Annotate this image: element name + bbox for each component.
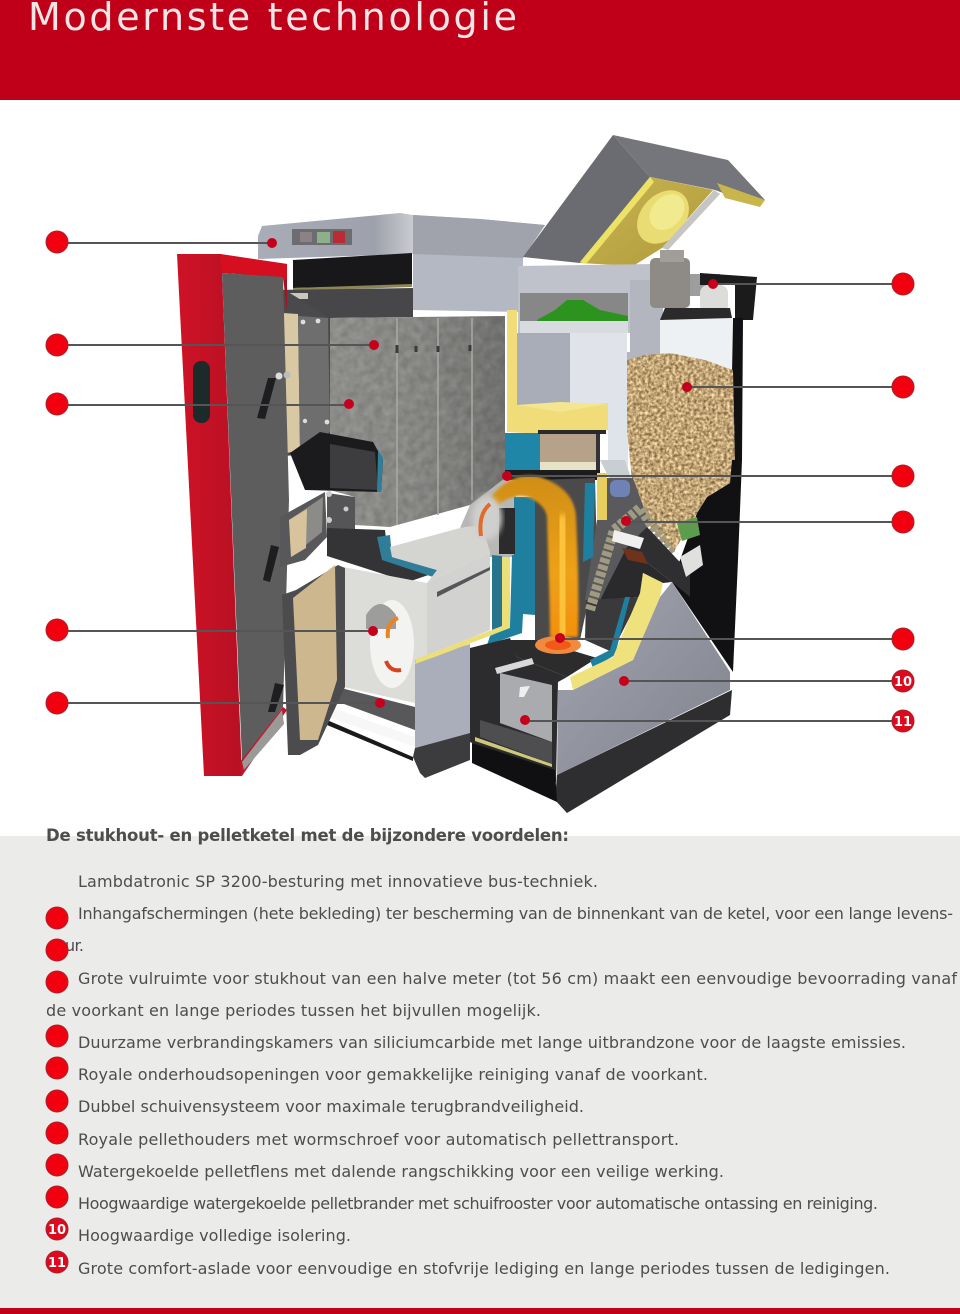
benefits list text: Royale pellethouders met wormschroef voor automatisch pellettransport. (78, 1130, 679, 1149)
boiler: chamber ledge (327, 525, 490, 583)
boiler: pellet auger (590, 480, 703, 610)
benefits list text: Lambdatronic SP 3200-besturing met innovatieve bus-techniek. (78, 872, 598, 891)
boiler: firebrick wall (330, 316, 505, 527)
list marker 11 (46, 1251, 68, 1273)
boiler: rear side panel (555, 573, 732, 813)
left callout markers (46, 231, 68, 714)
boiler: open lower door (282, 565, 345, 755)
boiler: yellow insulation upper (507, 310, 608, 434)
text panel background (0, 836, 960, 1308)
boiler cutaway illustration (177, 135, 765, 813)
benefits list text: Duurzame verbrandingskamers van siliciumcarbide met lange uitbrandzone voor de laagste emissies. (78, 1033, 906, 1052)
boiler: smoke zone backdrop (460, 478, 516, 557)
bottom band (0, 1308, 960, 1314)
boiler: middle door (280, 491, 355, 567)
right callout markers (892, 273, 914, 650)
benefits list text: Inhangafschermingen (hete bekleding) ter bescherming van de binnenkant van de ketel, voor een lange levens- (78, 904, 953, 923)
boiler: smoke and arrow (472, 496, 502, 540)
boiler: red door (177, 254, 294, 776)
boiler: pellets (627, 353, 735, 553)
boiler: flame (491, 475, 581, 654)
benefits list text: Hoogwaardige volledige isolering. (78, 1226, 351, 1245)
boiler: hopper lid (523, 135, 765, 266)
list marker 10: 10 (48, 1223, 66, 1238)
benefits list text: de voorkant en lange periodes tussen het bijvullen mogelijk. (46, 1001, 541, 1020)
boiler: black rear wall (672, 318, 743, 672)
boiler: flue section (505, 430, 635, 490)
marker 10 right (892, 670, 914, 692)
leader lines (68, 243, 892, 721)
benefits list text: Grote vulruimte voor stukhout van een halve meter (tot 56 cm) maakt een eenvoudige bevoorrading vanaf (78, 969, 957, 988)
boiler: combustion interior (510, 473, 672, 677)
boiler: inner hopper (517, 317, 732, 470)
boiler: ash chamber (470, 638, 567, 802)
boiler: combustion chamber (343, 552, 490, 703)
benefits list text: Royale onderhoudsopeningen voor gemakkelijke reiniging vanaf de voorkant. (78, 1065, 708, 1084)
list markers (46, 907, 68, 1208)
boiler: control housing (258, 213, 545, 318)
benefits list text: Hoogwaardige watergekoelde pelletbrander met schuifrooster voor automatische ontassing en reiniging. (78, 1194, 878, 1213)
boiler: lower floor (327, 644, 470, 778)
target dots (267, 238, 718, 725)
boiler: pellet feed box (518, 264, 663, 352)
list marker 11: 11 (48, 1256, 66, 1271)
marker 11 right: 11 (894, 715, 912, 730)
boiler: black hood (290, 432, 383, 492)
benefits list text (46, 872, 957, 1278)
boiler: teal jacket (415, 497, 535, 664)
header band (0, 0, 960, 100)
list marker 10 (46, 1218, 68, 1240)
boiler: door frame left (272, 290, 330, 456)
list heading: De stukhout- en pelletketel met de bijzondere voordelen: (46, 826, 569, 845)
marker 11 right (892, 710, 914, 732)
benefits list text: duur. (46, 936, 84, 955)
benefits list text: Dubbel schuivensysteem voor maximale terugbrandveiligheid. (78, 1097, 584, 1116)
marker 10 right: 10 (894, 675, 912, 690)
benefits list text: Grote comfort-aslade voor eenvoudige en stofvrije lediging en lange periodes tussen de ledigingen. (78, 1259, 890, 1278)
benefits list text: Watergekoelde pelletflens met dalende rangschikking voor een veilige werking. (78, 1162, 724, 1181)
boiler: burner pipe and fittings (650, 250, 757, 320)
